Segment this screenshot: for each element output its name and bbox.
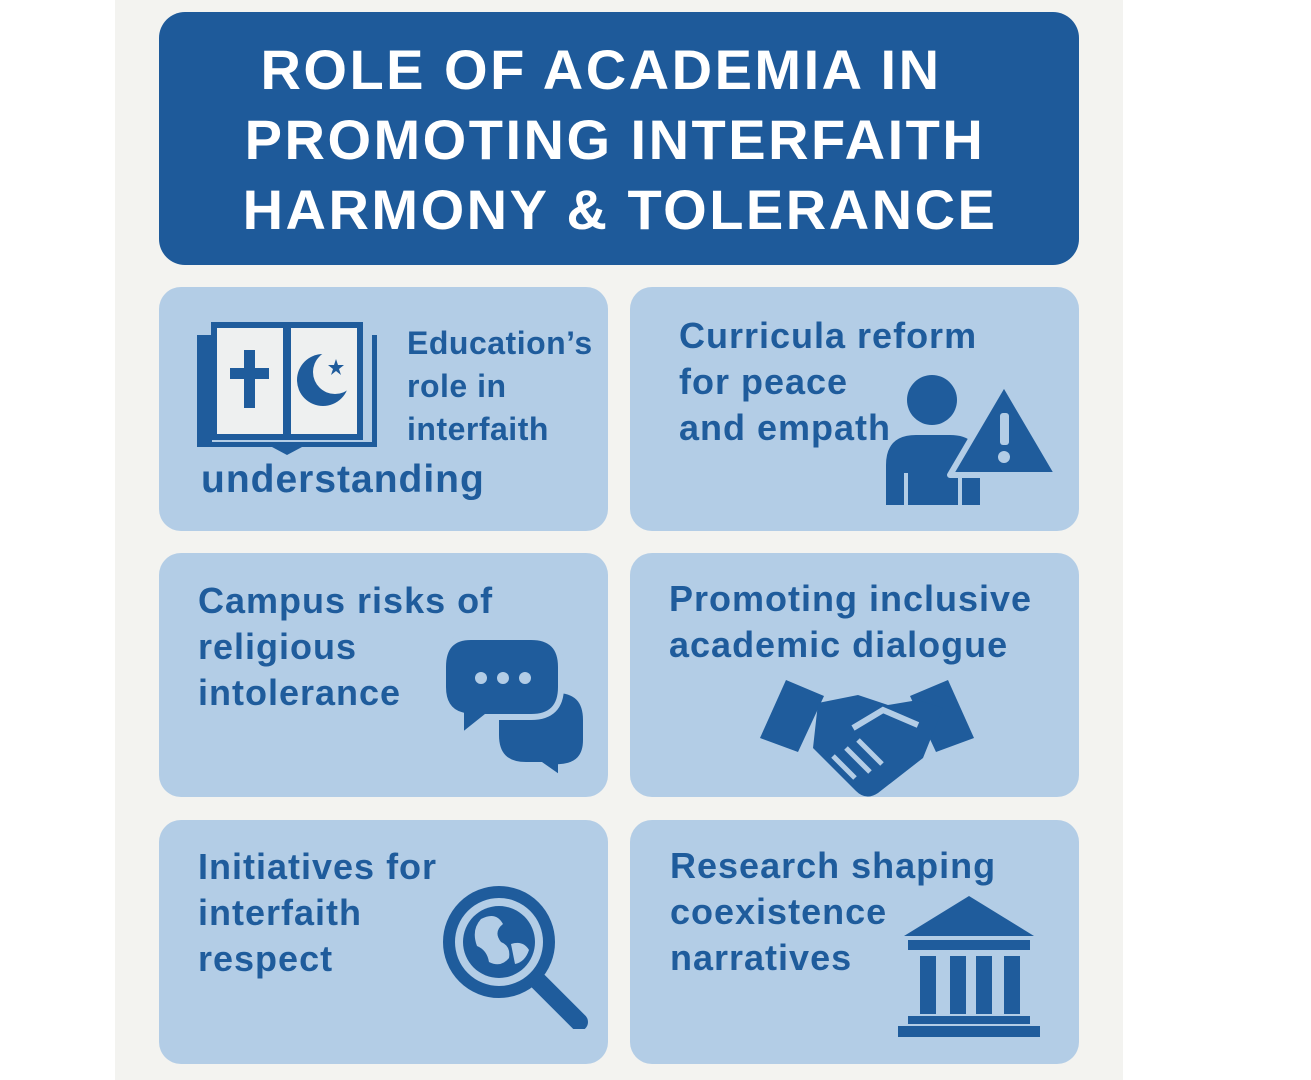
text: education: role in xyxy=(407,368,507,404)
title: ROLE OF ACADEMIA IN xyxy=(260,38,942,101)
text: dialogue xyxy=(669,578,1032,665)
text: education xyxy=(407,325,593,447)
title: HARMONY & TOLERANCE xyxy=(243,178,997,241)
panel: dialogue xyxy=(630,553,1079,797)
icon: chat bubbles xyxy=(446,640,583,774)
panel: research xyxy=(630,820,1079,1064)
text: initiatives: interfaith xyxy=(198,892,362,933)
text: dialogue: Promoting inclusive xyxy=(669,578,1032,619)
panel: curricula xyxy=(630,287,1079,531)
panel: initiatives xyxy=(159,820,608,1064)
text: curricula: Curricula reform xyxy=(679,315,977,356)
icon: book xyxy=(197,322,377,455)
text: research: coexistence xyxy=(670,891,887,932)
icon: globe magnifier xyxy=(443,886,588,1029)
text: education: interfaith xyxy=(407,411,549,447)
text: initiatives: Initiatives for xyxy=(198,846,437,887)
text: research: Research shaping xyxy=(670,845,996,886)
text: research: narratives xyxy=(670,937,852,978)
text: research xyxy=(670,845,996,978)
text: campus risks xyxy=(198,580,493,713)
text: initiatives: respect xyxy=(198,938,333,979)
text: understanding: understanding xyxy=(201,458,485,501)
text: curricula xyxy=(679,315,977,448)
icon: person warning xyxy=(886,375,1053,505)
title xyxy=(159,12,1079,265)
title: PROMOTING INTERFAITH xyxy=(245,108,985,171)
text: curricula: for peace xyxy=(679,361,848,402)
text: education: Education’s xyxy=(407,325,593,361)
text: campus risks: Campus risks of xyxy=(198,580,493,621)
text: campus risks: intolerance xyxy=(198,672,401,713)
panel: education xyxy=(159,287,608,531)
text: curricula: and empath xyxy=(679,407,891,448)
panel: campus risks xyxy=(159,553,608,797)
text: campus risks: religious xyxy=(198,626,357,667)
text: initiatives xyxy=(198,846,437,979)
text: dialogue: academic dialogue xyxy=(669,624,1008,665)
icon: handshake xyxy=(760,680,974,796)
icon: institution building xyxy=(898,896,1040,1037)
